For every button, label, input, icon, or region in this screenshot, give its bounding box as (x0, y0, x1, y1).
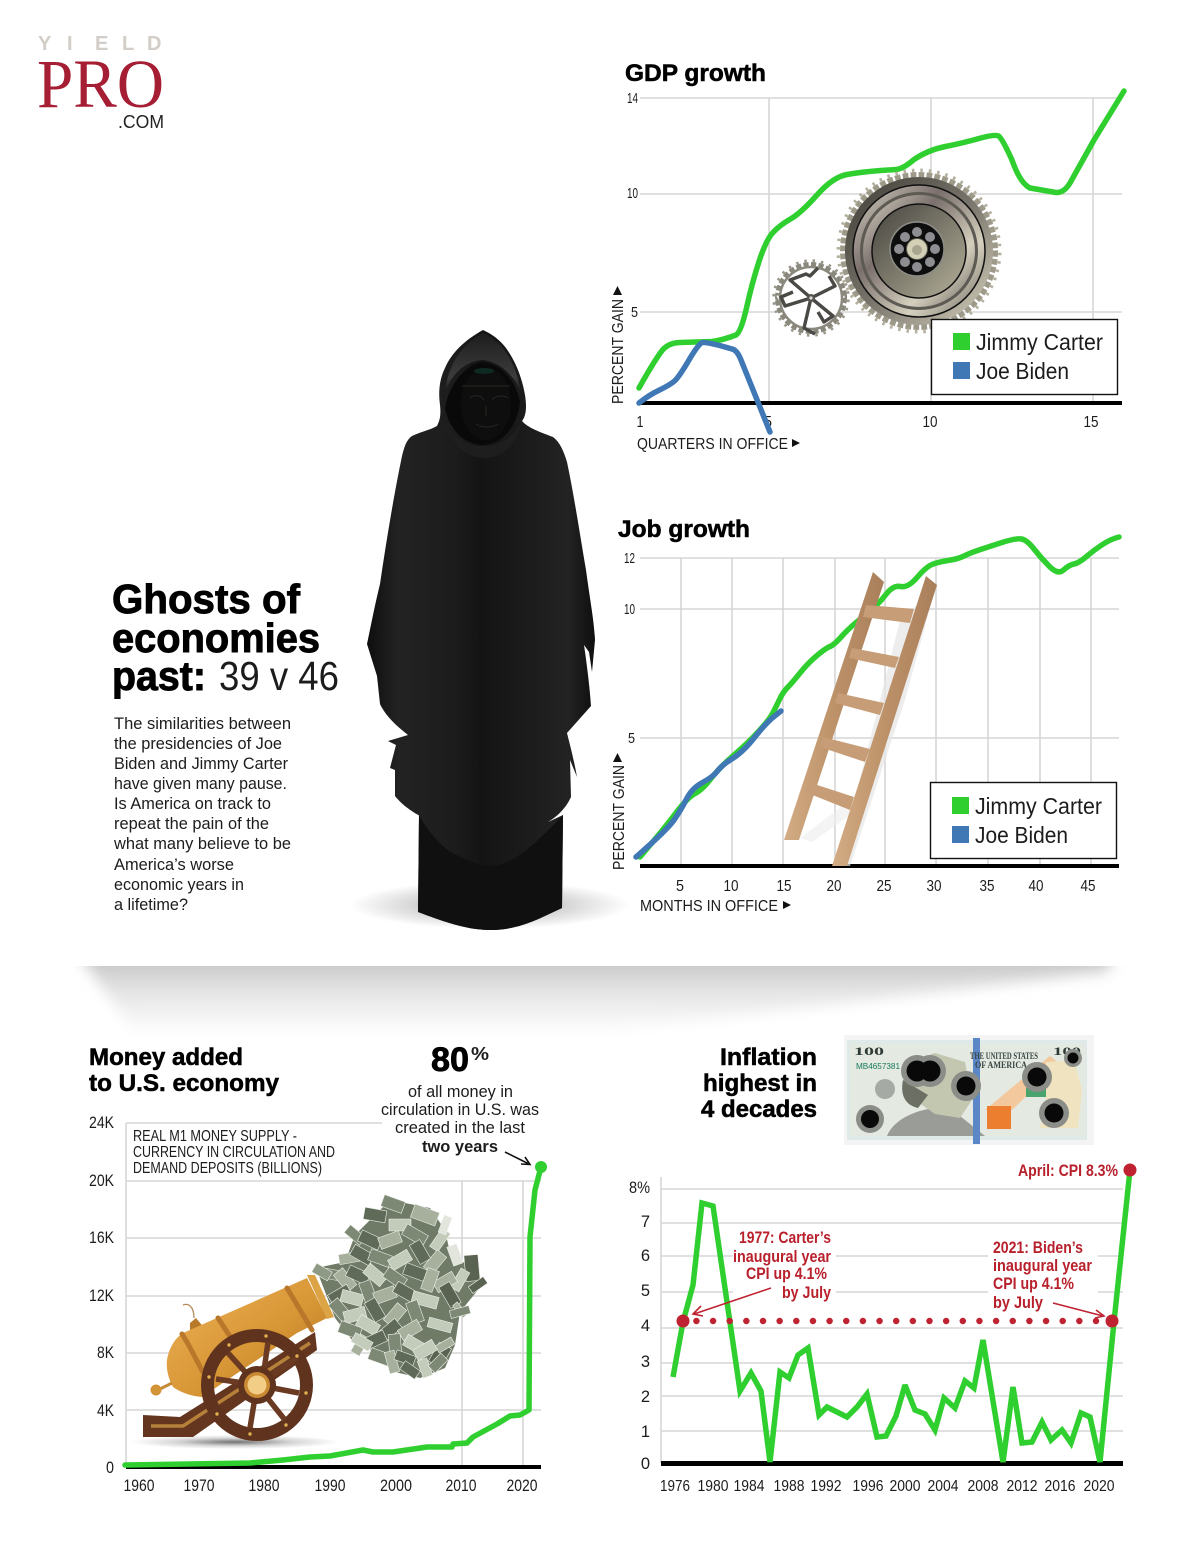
heading: inflation: highest in (703, 1070, 817, 1097)
x-axis labels: 1980 (248, 1477, 280, 1495)
cannon carriage (143, 1332, 317, 1437)
y-axis labels: 0 (641, 1455, 650, 1473)
bullet holes (856, 1049, 1082, 1133)
panel: title and intro (112, 576, 339, 914)
intro paragraph: The similarities between (114, 714, 291, 733)
note: real M1 money supply: CURRENCY IN CIRCULATION AND (133, 1144, 335, 1161)
annotation: April CPI 8.3 percent: April: CPI 8.3% (1018, 1161, 1118, 1180)
large gear (838, 170, 1000, 332)
heading: money added (89, 1044, 280, 1097)
y-axis labels: 8% (629, 1179, 650, 1197)
x-axis labels: 15 (776, 878, 792, 895)
logo: Yield Pro: D (147, 33, 161, 55)
x-axis labels (660, 1478, 1115, 1495)
gridlines (640, 98, 1122, 403)
intro paragraph: America’s worse (114, 855, 234, 874)
illustration: ladder (784, 572, 937, 866)
x-axis labels: 25 (876, 878, 892, 895)
intro paragraph: Is America on track to (114, 794, 271, 813)
illustration: bullet-riddled $100 bill: 100 (1053, 1044, 1081, 1058)
callout: 80 percent: created in the last (395, 1118, 525, 1137)
x-axis labels: 35 (980, 878, 995, 895)
line: Jimmy Carter GDP (639, 91, 1124, 388)
gridlines (640, 558, 1119, 866)
baseline (640, 864, 1119, 868)
callout: 80 percent: circulation in U.S. was (381, 1100, 539, 1119)
heading: Job growth: Job growth (618, 516, 750, 543)
gridlines (126, 1123, 541, 1467)
y-axis labels: 4K (97, 1402, 114, 1420)
main title: 39 v 46 (219, 653, 339, 699)
panel: Job growth chart (611, 516, 1119, 915)
logo: Yield Pro: .COM (118, 112, 164, 132)
x-axis labels: 2020 (1084, 1478, 1115, 1495)
arrow: Biden annotation (1053, 1303, 1104, 1318)
intro paragraph (113, 714, 291, 914)
legend (930, 782, 1116, 858)
x-axis labels: 45 (1080, 878, 1096, 895)
callout: 80 percent: 80 (431, 1041, 469, 1079)
logo: Yield Pro: I (67, 33, 73, 55)
annotation: 2021 Biden: inaugural year (993, 1256, 1092, 1275)
line: Joe Biden GDP (639, 342, 770, 432)
x-axis labels: 2000 (380, 1477, 412, 1495)
note: real M1 money supply: DEMAND DEPOSITS (BILLIONS) (133, 1160, 322, 1177)
y-axis labels: 3 (641, 1353, 650, 1371)
x-axis labels: 1980 (698, 1478, 729, 1495)
logo: Yield Pro: PRO (37, 46, 164, 122)
label backgrounds (733, 1228, 1098, 1312)
x-axis labels: 20 (826, 878, 842, 895)
x-axis labels: 15 (1084, 414, 1099, 431)
illustration: cannon shooting money (130, 1195, 488, 1449)
legend: Joe Biden (975, 822, 1068, 848)
heading: inflation (701, 1044, 817, 1123)
y-axis labels: 6 (641, 1247, 650, 1265)
axis title: percent gain: PERCENT GAIN (610, 299, 627, 404)
axis title: percent gain: PERCENT GAIN (611, 765, 628, 870)
x-axis labels (636, 414, 1099, 431)
illustration: bullet-riddled $100 bill: MB4657381 (856, 1062, 901, 1071)
x-axis labels: 10 (922, 414, 938, 431)
dotted 4.1 percent reference line (696, 1318, 1097, 1324)
callout: 80 percent: of all money in (408, 1082, 513, 1101)
marker: April CPI (1124, 1164, 1136, 1176)
y-axis labels (624, 550, 635, 747)
callout: 80 percent: % (471, 1044, 489, 1064)
line: M1 money supply (125, 1167, 541, 1465)
y-axis labels: 5 (641, 1282, 650, 1300)
x-axis labels: 1960 (124, 1477, 154, 1495)
arrow to latest value (505, 1152, 530, 1164)
annotation: 1977 Carter: inaugural year (733, 1247, 831, 1266)
x-axis labels: 1990 (314, 1477, 346, 1495)
y-axis labels: 24K (89, 1114, 114, 1132)
y-axis labels (89, 1114, 114, 1477)
x-axis labels: 2000 (890, 1478, 921, 1495)
y-axis labels: 20K (89, 1172, 114, 1190)
annotation: 2021 Biden: by July (993, 1293, 1043, 1312)
y-axis labels: 14 (627, 90, 638, 107)
main title: Ghosts of (112, 576, 300, 622)
legend (932, 320, 1118, 394)
x-axis labels (124, 1477, 538, 1495)
y-axis labels: 1 (641, 1423, 650, 1441)
x-axis labels: 40 (1028, 878, 1044, 895)
annotation: 2021 Biden: CPI up 4.1% (993, 1274, 1074, 1293)
x-axis labels: 1970 (184, 1477, 214, 1495)
y-axis labels: 10 (627, 185, 638, 202)
illustration: bullet-riddled $100 bill: THE UNITED STATES (970, 1051, 1038, 1061)
note: real M1 money supply: REAL M1 MONEY SUPPLY - (133, 1128, 297, 1145)
illustration: gears (774, 170, 1000, 335)
arrow: Carter annotation (693, 1288, 771, 1316)
x-axis labels: 30 (926, 878, 942, 895)
cannon shadow (130, 1435, 340, 1449)
y-axis labels: 10 (624, 601, 635, 618)
illustration: bullet-riddled $100 bill (844, 1035, 1094, 1145)
illustration: bullet-riddled $100 bill: OF AMERICA (975, 1060, 1027, 1070)
callout: 80 percent (381, 1041, 539, 1156)
y-axis labels: 8K (97, 1344, 114, 1362)
legend: Jimmy Carter (976, 329, 1103, 355)
x-axis labels: 2016 (1044, 1478, 1076, 1495)
y-axis labels: 7 (641, 1213, 650, 1231)
x-axis labels: 2008 (968, 1478, 999, 1495)
logo: Yield Pro: Y (38, 33, 52, 55)
x-axis labels: 1992 (810, 1478, 842, 1495)
x-axis labels: 2020 (506, 1477, 538, 1495)
y-axis labels: 4 (641, 1317, 650, 1335)
main title (112, 576, 339, 699)
x-axis labels: 2010 (446, 1477, 476, 1495)
x-axis labels: 1 (636, 414, 644, 431)
intro paragraph: repeat the pain of the (114, 814, 269, 833)
y-axis labels: 16K (89, 1229, 114, 1247)
logo: Yield Pro: E (95, 33, 108, 55)
callout: 80 percent: two years (422, 1137, 498, 1156)
panel: Money added chart (89, 1041, 547, 1495)
heading: money added: to U.S. economy (89, 1070, 280, 1097)
intro paragraph: economic years in (114, 875, 244, 894)
illustration: bullet-riddled $100 bill: 100 (854, 1044, 884, 1058)
x-axis labels: 2012 (1006, 1478, 1038, 1495)
gridlines (661, 1177, 1123, 1463)
panel: Inflation chart (629, 1035, 1136, 1495)
heading: inflation: 4 decades (701, 1096, 817, 1123)
intro paragraph: Biden and Jimmy Carter (114, 754, 288, 773)
baseline (661, 1461, 1123, 1466)
annotation: 2021 Biden: 2021: Biden’s (993, 1238, 1083, 1257)
intro paragraph: what many believe to be (113, 834, 291, 853)
marker: 2021 Biden (1106, 1314, 1118, 1328)
heading: inflation: Inflation (720, 1044, 817, 1071)
annotation: 1977 Carter: 1977: Carter’s (739, 1228, 831, 1247)
x-axis labels: 1984 (734, 1478, 765, 1495)
y-axis labels: 5 (631, 304, 638, 321)
intro paragraph: have given many pause. (114, 774, 287, 793)
axis title: quarters in office: QUARTERS IN OFFICE (637, 436, 788, 453)
annotation: 2021 Biden (993, 1238, 1092, 1312)
annotation: 1977 Carter: CPI up 4.1% (746, 1264, 827, 1283)
panel: GDP growth chart (610, 60, 1124, 453)
note: real M1 money supply (133, 1128, 335, 1177)
x-axis labels: 1976 (660, 1478, 690, 1495)
end point (535, 1161, 547, 1173)
legend: Jimmy Carter (975, 793, 1102, 819)
heading: money added: Money added (89, 1044, 243, 1071)
annotation: 1977 Carter (733, 1228, 831, 1302)
x-axis labels: 10 (724, 878, 739, 895)
cannon wheel (207, 1334, 308, 1436)
axis title: months in office: MONTHS IN OFFICE (640, 898, 778, 915)
y-axis labels: 0 (106, 1459, 114, 1477)
legend: Joe Biden (976, 358, 1069, 384)
x-axis labels: 2004 (928, 1478, 959, 1495)
x-axis labels: 5 (676, 878, 684, 895)
line: Jimmy Carter jobs (640, 537, 1119, 857)
heading: GDP growth: GDP growth (625, 60, 766, 87)
x-axis labels (676, 878, 1096, 895)
y-axis labels (627, 90, 638, 321)
intro paragraph: a lifetime? (114, 895, 188, 914)
illustration: hooded ghost figure (350, 330, 630, 930)
logo: Yield Pro: L (122, 33, 134, 55)
main title: past: (112, 653, 206, 699)
small gear (774, 261, 848, 335)
cannon barrel (150, 1275, 334, 1397)
y-axis labels: 5 (628, 730, 635, 747)
annotation: 1977 Carter: by July (782, 1283, 831, 1302)
y-axis labels: 12K (89, 1287, 114, 1305)
marker: 1977 Carter (676, 1314, 690, 1328)
x-axis labels: 1996 (852, 1478, 884, 1495)
x-axis labels: 5 (764, 414, 772, 431)
y-axis labels (629, 1179, 650, 1473)
baseline (126, 1465, 541, 1469)
y-axis labels: 12 (624, 550, 635, 567)
y-axis labels: 2 (641, 1388, 650, 1406)
main title: economies (112, 615, 320, 661)
line: Joe Biden jobs (636, 711, 781, 857)
baseline (640, 401, 1122, 405)
line: CPI inflation (673, 1170, 1130, 1462)
flying dollar bills (312, 1195, 488, 1379)
intro paragraph: the presidencies of Joe (114, 734, 282, 753)
x-axis labels: 1988 (774, 1478, 805, 1495)
